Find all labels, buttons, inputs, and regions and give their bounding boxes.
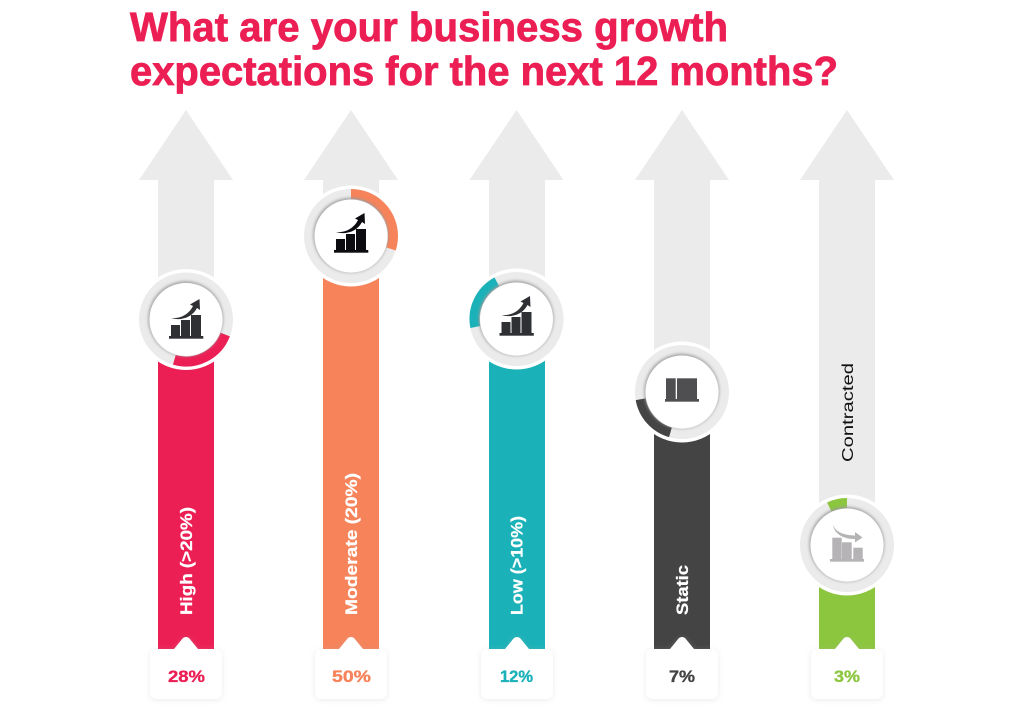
value box: low — [481, 637, 553, 700]
icon: falling bars — [830, 524, 864, 562]
bar: moderate — [323, 236, 379, 650]
arrow background — [304, 110, 398, 400]
label: contracted: Contracted — [840, 363, 857, 462]
value box: high — [150, 637, 222, 700]
bar: contracted — [819, 545, 875, 650]
label: static: Static — [674, 565, 692, 615]
arrow background — [635, 110, 729, 400]
gauge: high — [132, 265, 240, 374]
value box: contracted: 3% — [834, 667, 860, 686]
value box: moderate: 50% — [332, 667, 371, 686]
arrow background — [800, 110, 894, 560]
value box: static — [646, 637, 718, 700]
value box: high: 28% — [168, 667, 205, 686]
icon: rising bars — [500, 296, 534, 336]
panel: low — [466, 110, 567, 700]
icon: rising bars — [169, 299, 203, 339]
panel: moderate — [300, 110, 402, 700]
label: low: Low (>10%) — [508, 516, 526, 615]
gauge: static — [630, 340, 734, 444]
bar: static — [654, 392, 710, 650]
title — [130, 4, 838, 94]
label: moderate: Moderate (20%) — [343, 473, 361, 615]
gauge: low — [466, 268, 567, 370]
gauge: contracted — [791, 489, 903, 601]
title: What are your business growth — [130, 4, 728, 50]
value box: moderate — [315, 637, 387, 700]
bar: high — [158, 319, 214, 650]
arrow background — [139, 110, 233, 400]
icon: rising bars — [334, 213, 368, 253]
gauge: moderate — [300, 186, 402, 286]
panel: contracted — [791, 110, 903, 700]
bar: low — [489, 319, 545, 650]
value box: low: 12% — [500, 667, 533, 686]
panel: high — [132, 110, 240, 700]
icon: flat bars — [665, 378, 699, 402]
title: expectations for the next 12 months? — [130, 48, 838, 94]
arrow background — [470, 110, 564, 400]
value box: contracted — [811, 637, 883, 700]
value box: static: 7% — [669, 667, 695, 686]
panel: static — [630, 110, 734, 700]
label: high: High (>20%) — [178, 507, 196, 615]
